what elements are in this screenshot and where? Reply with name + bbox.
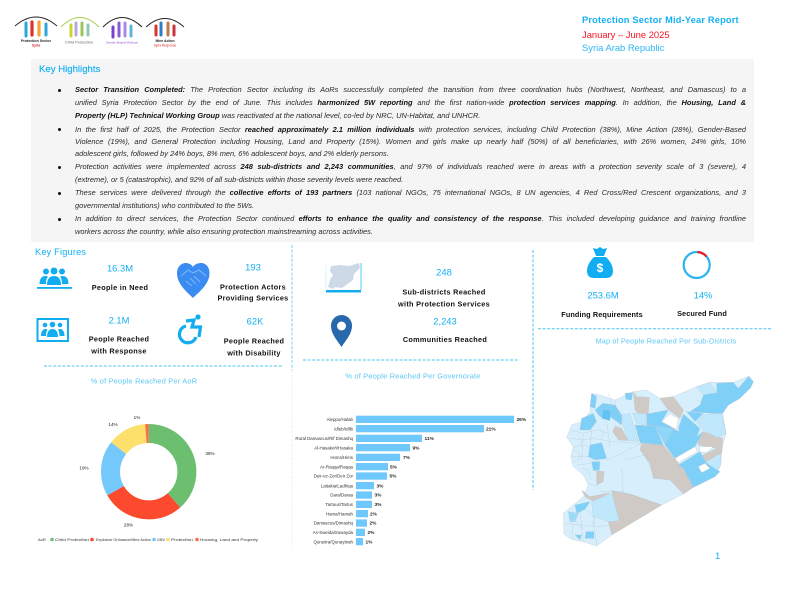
chart: bars per governorate: 3% (374, 502, 382, 508)
chart: bars per governorate: 26% (516, 417, 527, 423)
chart: secured fund ring (682, 250, 711, 280)
chart: bars per governorate: Al-Hasakeh/Hasaka (314, 445, 354, 450)
text block: highlights list: In the first half of 2025, the Protection Sector reached approximately 2.1 million individuals with protection services, including Child Protection (38%), Mine Action (28%), Gender-Based (75, 124, 746, 134)
stat: people reached with response: People Reached (89, 334, 149, 343)
heading: key highlights: Key Highlights (39, 64, 100, 75)
chart: bars per governorate: Tartous/Tartus (325, 502, 354, 507)
text block: highlights list: governmental institutions) who contributed to the 5Ws. (75, 201, 254, 210)
stat: communities reached: Communities Reached (403, 335, 487, 344)
chart: bars per governorate: Damascus/Dimashq (314, 521, 354, 526)
chart: bars per governorate: 2% (368, 530, 375, 536)
text block: highlights list: workers across the country, while also ensuring protection mainstreaming across activities. (75, 227, 373, 236)
text block: highlights list: unified Syria Protection Sector by the end of June. This includes harmonized 5W reporting and the first nation-wide protection services mapping. In addition, the Housing, Land & (75, 98, 746, 107)
page number: 1 (715, 551, 720, 562)
chart: bars per governorate: 21% (486, 426, 496, 432)
logo: Mine Action: Mine Action (155, 39, 175, 43)
logo: Protection Sector: Syria (32, 44, 40, 48)
chart: bars per governorate: 5% (390, 474, 397, 480)
stat: people reached with disability: 62K (247, 316, 263, 326)
stat: funding requirements (561, 290, 643, 319)
stat: people in need (92, 262, 148, 292)
stat: secured fund: Secured Fund (677, 309, 727, 318)
icon: people reached (36, 318, 69, 342)
stat: people reached with disability: with Disability (227, 348, 281, 357)
chart: bars per governorate: Idleb/Idlib (334, 426, 354, 431)
map: people reached per sub-district (563, 376, 754, 546)
chart: bars per governorate: 2% (370, 521, 377, 527)
report title block: January – June 2025 (582, 29, 670, 40)
stat: sub-districts reached: 248 (436, 266, 452, 278)
legend (38, 537, 258, 542)
chart: bars per governorate: Hama/Hamah (326, 511, 354, 516)
text block: highlights list: Violence (19%), and General Protection including Housing, Land and Property (15%). Women and girls make up nearly half (50%) of all beneficiaries, with 26% women, 24% girls, 10% (75, 137, 746, 146)
stat: protection actors (217, 262, 289, 302)
legend: Explosive Ordnance/Mine Action (96, 537, 151, 542)
text block: highlights list: Property (HLP) Technical Working Group was reactivated at the national level, co-led by NRC, UN-Habitat, and UNHCR. (75, 111, 480, 120)
stat: protection actors: 193 (245, 262, 261, 272)
text block: highlights list (58, 85, 746, 236)
heading: governorate chart title: % of People Reached Per Governorate (345, 372, 481, 380)
icon: money bag (587, 247, 613, 278)
legend: GBV (157, 537, 165, 542)
legend: Child Protection (55, 537, 89, 542)
stat: people reached with response: with Response (91, 346, 147, 355)
chart: donut AoR (38, 415, 258, 542)
chart: bars per governorate: Aleppo/Halab (327, 417, 354, 422)
stat: funding requirements: Funding Requirements (561, 310, 643, 319)
text block: highlights list: In addition to direct services, the Protection Sector continued efforts to enhance the quality and consistency of the response. This included developing guidance and training frontline (75, 214, 746, 223)
chart: donut AoR: 38% (205, 451, 215, 456)
logos: partner logos (14, 16, 184, 48)
legend: Housing, Land and Property (200, 537, 258, 542)
logo: Child Protection (61, 18, 99, 44)
icon: wheelchair (178, 314, 202, 344)
icon: people in need (37, 268, 72, 289)
chart: bars per governorate: 2% (370, 511, 378, 517)
chart: bars per governorate: Ar-Raqqa/Raqqa (320, 464, 354, 469)
heading: key figures: Key Figures (35, 247, 86, 257)
legend: Protection (171, 537, 193, 542)
stat: secured fund: 14% (694, 290, 712, 300)
stat: people reached with disability: People Reached (224, 336, 284, 345)
stat: sub-districts reached: with Protection Services (398, 299, 490, 308)
text block: highlights list: adolescent girls, followed by 24% boys, 8% men, 6% adolescent boys, and 2% elderly persons. (75, 149, 389, 158)
stat: people reached with response (89, 314, 149, 355)
chart: bars per governorate: 3% (374, 493, 382, 499)
stat: people in need: 16.3M (107, 262, 133, 274)
heading: AoR chart title: % of People Reached Per AoR (91, 376, 197, 386)
logo: GBV (103, 18, 142, 44)
logo: Child Protection: Child Protection (65, 40, 93, 44)
chart: bars per governorate: 7% (403, 455, 411, 461)
chart: bars per governorate: 9% (412, 445, 420, 451)
logo: Mine Action: Syria Response (154, 44, 176, 48)
chart: bars per governorate: Quneitra/Qunaytirah (313, 539, 354, 544)
chart: bars per governorate: Lattakia/Ladhiqa (321, 483, 354, 488)
logo: GBV: Gender-Based Violence (106, 40, 138, 44)
report title block: Syria Arab Republic (582, 42, 664, 53)
text block: highlights list: (extreme), or 5 (catastrophic), and 92% of all sub-districts within those severity levels were reached. (75, 175, 403, 184)
chart: donut AoR: 28% (124, 522, 133, 528)
chart: bars per governorate: 1% (366, 539, 373, 545)
heading: map title: Map of People Reached Per Sub-Districts (596, 336, 736, 346)
stat: people reached with disability (224, 316, 284, 357)
chart: donut AoR: 1% (134, 415, 140, 420)
chart: bars per governorate: As-Sweida/Suwayda (313, 530, 354, 535)
icon: location pin (331, 315, 352, 347)
stat: communities reached (403, 316, 487, 344)
chart: bars per governorate: 5% (390, 464, 398, 470)
stat: sub-districts reached: Sub-districts Reached (402, 287, 486, 296)
report title block (582, 15, 739, 53)
stat: funding requirements: 253.6M (587, 290, 619, 300)
stat: people reached with response: 2.1M (109, 314, 129, 326)
chart: bars per governorate: Homs/Hims (330, 455, 354, 460)
text block: highlights list: Protection activities were implemented across 248 sub-districts and 2,243 communities, and 97% of individuals reached were in areas with a protection severity scale of 3 (severe), 4 (75, 162, 746, 171)
stat: protection actors: Providing Services (217, 294, 289, 302)
chart: donut AoR: 19% (79, 466, 89, 470)
chart: bars per governorate: Rural Damascus/Rif Dimashq (295, 436, 354, 441)
chart: bars per governorate: Dara/Daraa (330, 493, 354, 498)
chart: donut AoR: 14% (108, 422, 118, 427)
chart: bars per governorate: Deir-ez-Zor/Deir Zor (314, 474, 354, 479)
panel: key highlights (31, 59, 754, 242)
stat: people in need: People in Need (92, 283, 148, 292)
stat: protection actors: Protection Actors (220, 282, 286, 291)
chart: bars per governorate: 3% (376, 483, 384, 489)
icon: money bag: $ (597, 261, 604, 275)
stat: secured fund (677, 290, 727, 318)
icon: handshake heart (177, 263, 210, 298)
logo: Mine Action (146, 18, 184, 48)
stat: communities reached: 2,243 (433, 316, 457, 326)
text block: highlights list: These services were delivered through the collective efforts of 193 partners (103 national NGOs, 75 international NGOs, 8 UN agencies, 4 Red Cross/Red Crescent organizations, and 3 (75, 188, 746, 197)
chart: bars per governorate: 11% (424, 436, 435, 442)
text block: highlights list: Sector Transition Completed: The Protection Sector including its AoRs successfully completed the transition from three coordination hubs (Northwest, Northeast, and Damascus) to a (75, 85, 746, 94)
icon: syria map (326, 263, 362, 292)
logo: Protection Sector: Protection Sector (21, 39, 52, 43)
stat: sub-districts reached (398, 266, 490, 308)
logo: Protection Sector (15, 17, 57, 48)
chart: bars per governorate (295, 416, 527, 546)
report title block: Protection Sector Mid-Year Report (582, 15, 739, 25)
legend: AoR (38, 537, 46, 542)
